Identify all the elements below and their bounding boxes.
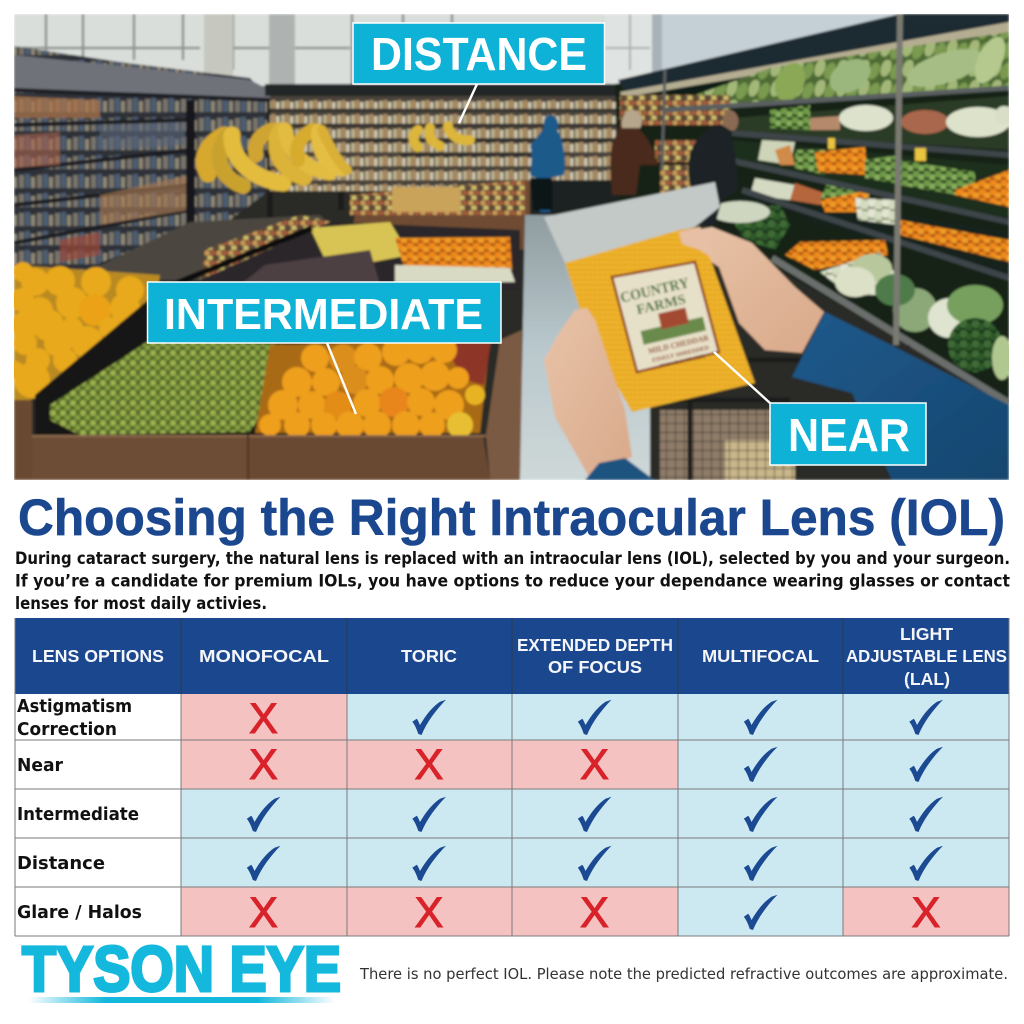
table header row: MONOFOCAL — [199, 646, 329, 666]
shopping cart — [650, 345, 910, 480]
row: glare and halos — [17, 889, 940, 937]
comparison table — [15, 618, 1009, 937]
price tags — [828, 138, 926, 161]
far aisle floor — [520, 215, 670, 480]
row: distance — [17, 846, 943, 881]
table header row: TORIC — [401, 646, 457, 666]
label: near: NEAR — [788, 409, 910, 461]
row: astigmatism correction: Astigmatism — [17, 696, 132, 717]
product label: Country Farms: FINELY SHREDDED — [652, 345, 710, 364]
row: near: Near — [17, 755, 63, 776]
right sleeve — [792, 312, 1009, 480]
label: distance: DISTANCE — [371, 28, 587, 80]
row: glare and halos: Glare / Halos — [17, 902, 142, 923]
wooden bin fronts — [14, 330, 522, 480]
vegetables: second shelf — [655, 96, 1013, 162]
product label: Country Farms — [612, 262, 719, 375]
right wall shelves — [614, 14, 1009, 306]
row: near: X — [415, 741, 443, 789]
cheese bag: clear top — [544, 182, 720, 263]
table header row: MULTIFOCAL — [702, 646, 819, 666]
product label: Country Farms: MILD CHEDDAR — [647, 333, 710, 356]
store windows and ceiling — [14, 14, 898, 88]
vegetables: bottom shelf — [715, 198, 1009, 382]
intro paragraph — [15, 549, 1010, 614]
shoppers — [530, 110, 738, 225]
left hand — [544, 308, 632, 477]
left wall shelves — [14, 46, 344, 280]
cheese bag: shredded cheese — [565, 227, 755, 412]
row: intermediate — [17, 797, 943, 832]
footnote: There is no perfect IOL. Please note the predicted refractive outcomes are approximate. — [359, 965, 1008, 983]
table header row: LIGHT — [900, 624, 953, 644]
row: distance: Distance — [17, 853, 105, 874]
row: glare and halos: X — [912, 889, 940, 937]
intro paragraph: lenses for most daily activies. — [15, 594, 267, 614]
label: intermediate: INTERMEDIATE — [164, 290, 483, 339]
product label: Country Farms: FARMS — [635, 292, 687, 318]
row: intermediate: Intermediate — [17, 804, 139, 825]
row: near: X — [249, 741, 278, 789]
row: glare and halos: X — [249, 889, 278, 937]
row: near: X — [580, 741, 609, 789]
pointer line: near — [714, 352, 770, 403]
product label: Country Farms: NET WT 16 OZ (1LB) — [660, 354, 706, 370]
row: astigmatism correction — [17, 695, 943, 743]
photo: grocery store aisle — [6, 14, 1013, 480]
row: glare and halos: X — [415, 889, 443, 937]
vegetables: top shelf — [620, 32, 1011, 125]
table header row: OF FOCUS — [548, 657, 642, 677]
logo: Tyson Eye: TYSON EYE — [22, 933, 341, 1005]
table header row — [15, 618, 1009, 694]
row: glare and halos: X — [580, 889, 609, 937]
title: Choosing the Right Intraocular Lens (IOL) — [18, 489, 1005, 546]
fingers over bag — [678, 226, 710, 258]
dark photo base — [29, 84, 988, 479]
vegetables: third shelf — [660, 140, 1009, 218]
left sleeve — [585, 458, 654, 480]
left oranges display — [6, 262, 160, 405]
table header row: EXTENDED DEPTH — [517, 635, 673, 655]
bananas on rack — [204, 126, 470, 186]
back wall shelves — [265, 84, 640, 220]
row: astigmatism correction: X — [249, 695, 278, 743]
table header row: ADJUSTABLE LENS — [846, 646, 1007, 666]
table header row: LENS OPTIONS — [32, 646, 164, 666]
left aisle floor — [99, 214, 325, 281]
pointer line: intermediate — [327, 343, 356, 414]
table header row: (LAL) — [904, 669, 950, 689]
row: near — [17, 741, 943, 789]
grapes and bin — [34, 300, 299, 436]
pointer line: distance — [459, 84, 477, 123]
product label: Country Farms: COUNTRY — [619, 275, 691, 307]
shelf rails — [662, 14, 1009, 403]
row: astigmatism correction: Correction — [17, 719, 117, 740]
central produce bins — [160, 180, 530, 290]
central oranges — [255, 335, 492, 439]
right hand — [680, 227, 824, 353]
row backgrounds — [15, 618, 1009, 936]
vegetables: fourth shelf — [750, 176, 1009, 264]
